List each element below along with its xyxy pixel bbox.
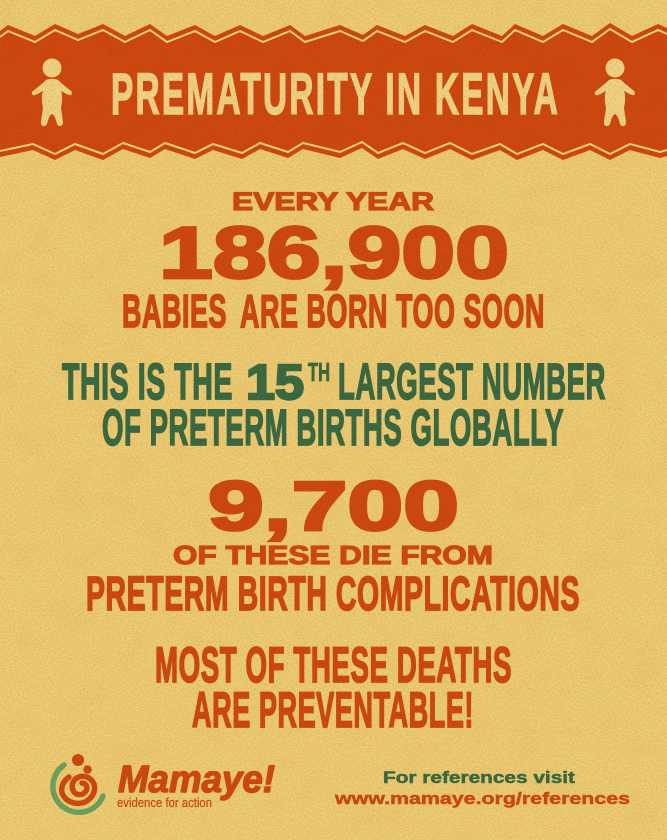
- link: mamaye references url: www.mamaye.org/references: [334, 789, 630, 808]
- icon: baby left: [32, 58, 72, 126]
- superscript: th: TH: [308, 357, 330, 387]
- text: this is the: THIS IS THE: [62, 353, 233, 410]
- text: of these die from: OF THESE DIE FROM: [173, 540, 493, 570]
- logo tagline: evidence for action: [117, 795, 212, 810]
- references note: [334, 769, 630, 808]
- stat number: 186,900: 186,900: [159, 213, 509, 294]
- stat: every year heading: EVERY YEAR: [232, 188, 434, 216]
- text: fifteenth largest number: [62, 353, 606, 410]
- banner top cream zigzag: [0, 29, 667, 42]
- banner: [0, 23, 667, 160]
- banner ribbon shape: [0, 23, 667, 160]
- text: for references visit: For references visit: [383, 769, 576, 787]
- stat number: 9,700: 9,700: [208, 467, 459, 545]
- banner bottom cream zigzag: [0, 142, 667, 154]
- number: 15: 15: [246, 356, 304, 410]
- logo mark: [53, 754, 103, 812]
- icon: baby right: [595, 58, 635, 126]
- logo: Mamaye: [53, 754, 275, 812]
- word: babies: BABIES: [122, 285, 227, 337]
- logo wordmark: Mamaye!: [118, 759, 275, 801]
- text: babies are born too soon: [122, 285, 545, 337]
